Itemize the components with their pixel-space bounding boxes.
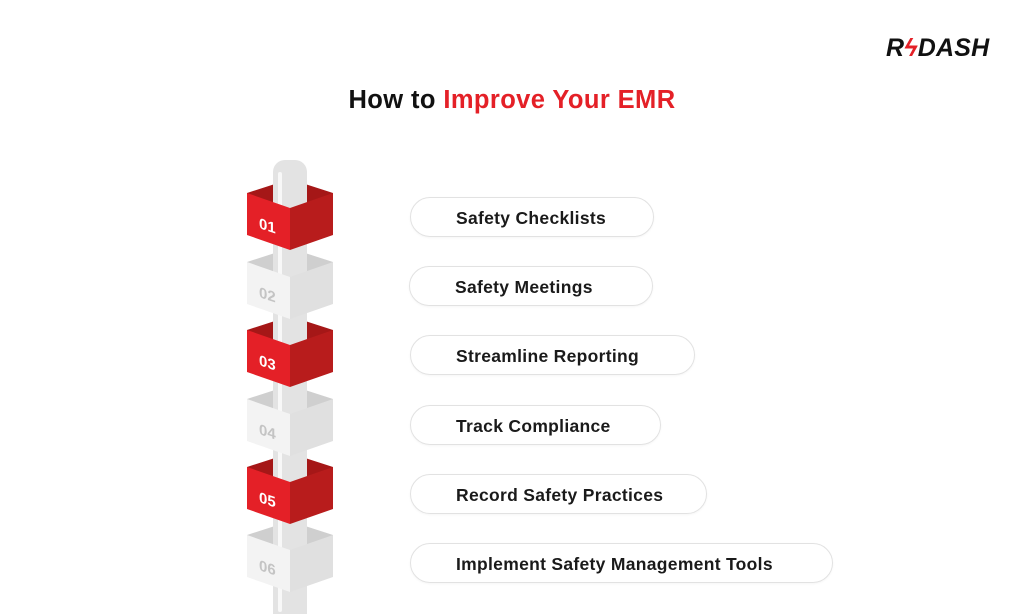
step 5 label: Record Safety Practices	[456, 485, 663, 505]
step 2 label: Safety Meetings	[455, 277, 593, 297]
pole	[273, 160, 307, 614]
step 6 label: Implement Safety Management Tools	[456, 554, 773, 574]
cube 03: 03	[259, 352, 276, 374]
cube 04: 04	[259, 421, 276, 444]
step 4 label: Track Compliance	[456, 416, 611, 436]
title: How to Improve Your EMR	[348, 86, 676, 114]
cube 04	[247, 399, 333, 456]
cube 03	[247, 330, 333, 387]
cube 05	[247, 467, 333, 524]
cube 05: 05	[259, 489, 276, 512]
cube 02	[247, 262, 333, 319]
logo: RϟDASH	[886, 34, 989, 62]
cube 06: 06	[259, 557, 276, 579]
step 1 label: Safety Checklists	[456, 208, 606, 228]
cube 06	[247, 535, 333, 592]
step 3 label: Streamline Reporting	[456, 346, 639, 366]
step 2 label	[409, 266, 653, 306]
step 4 label	[410, 405, 661, 445]
step 5 label	[410, 474, 707, 514]
cube 02: 02	[259, 284, 276, 306]
cube 01	[247, 193, 333, 250]
step 3 label	[410, 335, 695, 375]
cube 01: 01	[259, 215, 276, 238]
step 6 label	[410, 543, 833, 583]
step 1 label	[410, 197, 654, 237]
